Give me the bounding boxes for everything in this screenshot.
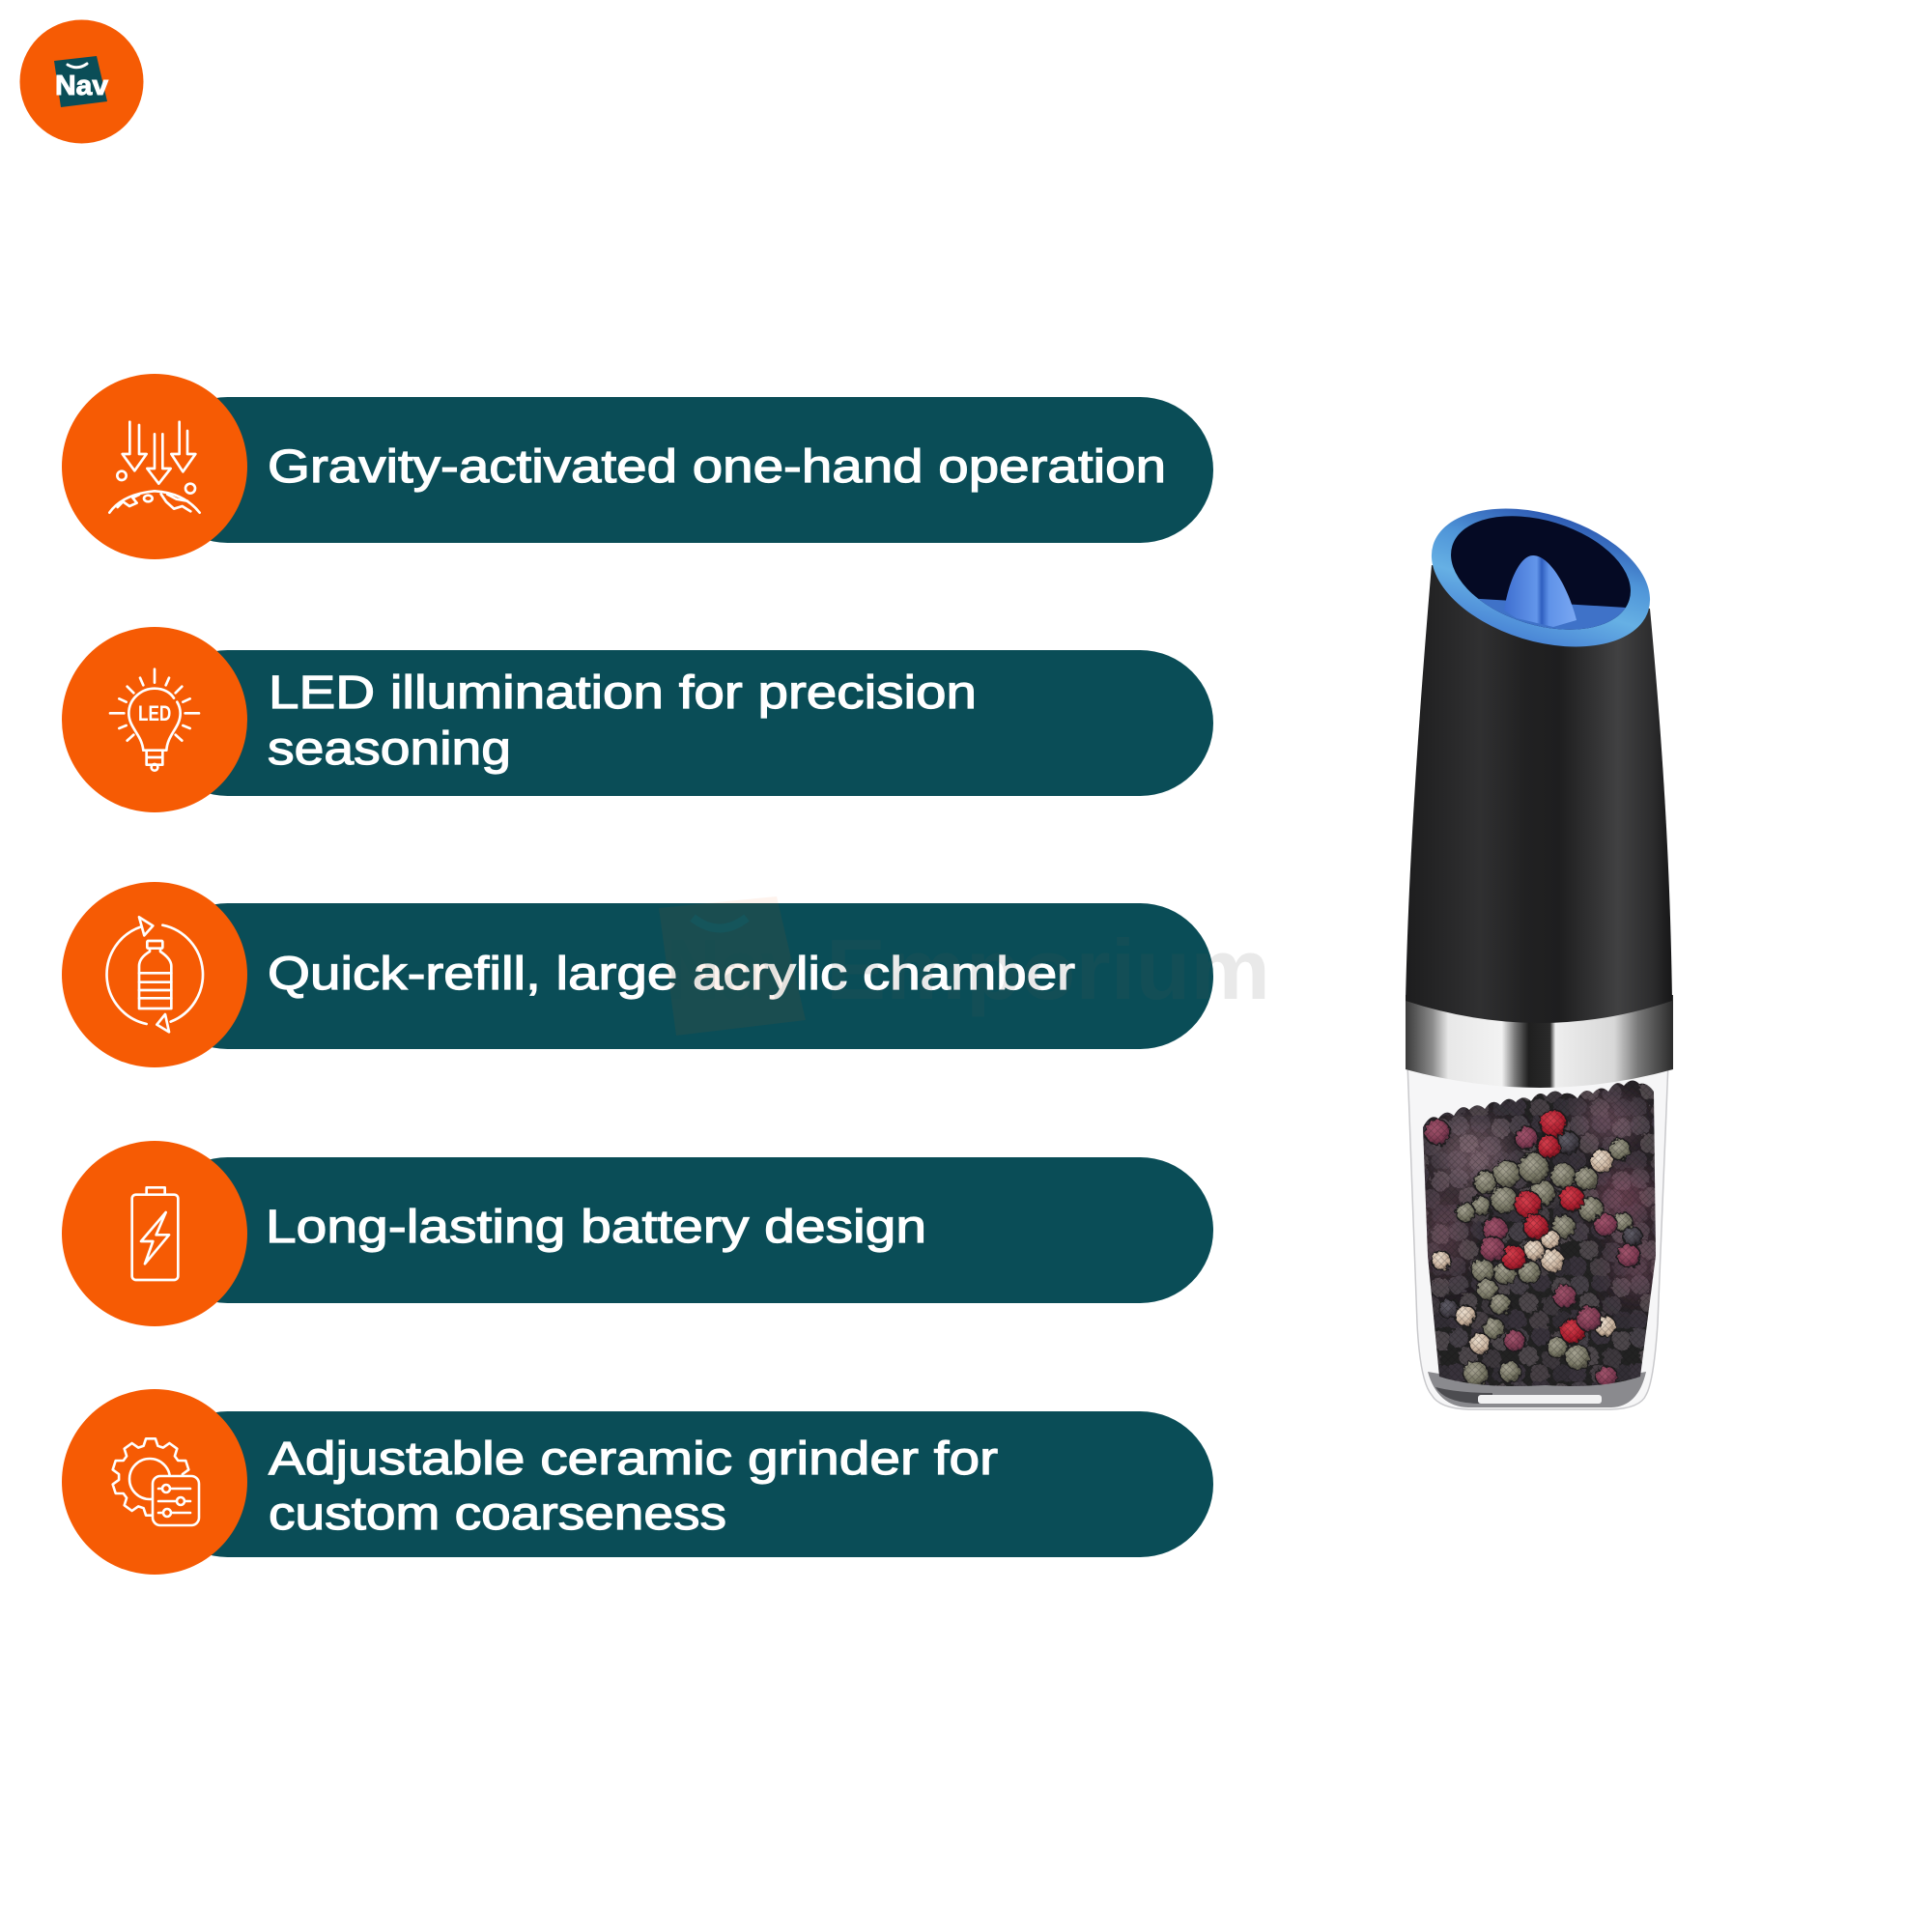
text: refill: Quick-refill, large acrylic chamber	[268, 949, 1075, 1000]
text: LED	[268, 668, 977, 775]
feature row 1: gravity	[62, 374, 1213, 559]
icon badge: LED bulb	[62, 627, 247, 812]
product photo: pepper grinder	[1406, 484, 1673, 1409]
peppercorns	[1423, 1080, 1656, 1386]
text: grinder: custom coarseness	[269, 1489, 726, 1540]
logo badge: Nav	[55, 71, 108, 101]
text: battery: Long-lasting battery design	[266, 1202, 926, 1253]
pill bar 4	[155, 1157, 1213, 1303]
feature row 2: LED	[62, 627, 1213, 812]
feature row 3: refill	[62, 882, 1213, 1067]
text: LED: seasoning	[268, 724, 511, 775]
watermark: Nav Emporium: Emporium	[826, 922, 1270, 1017]
icon badge: bottle refill	[62, 882, 247, 1067]
icon badge: battery	[62, 1141, 247, 1326]
pill bar 1	[155, 397, 1213, 543]
feature row 4: battery	[62, 1141, 1213, 1326]
feature row 5: grinder	[62, 1389, 1213, 1575]
text: gravity: Gravity-activated one-hand operation	[268, 441, 1166, 493]
pill bar 3	[155, 903, 1213, 1049]
black body	[1406, 565, 1672, 1023]
blue rim	[1432, 508, 1650, 647]
watermark: Nav Emporium	[659, 896, 1270, 1036]
text: grinder: Adjustable ceramic grinder for	[269, 1434, 998, 1485]
pill bar 2	[155, 650, 1213, 796]
icon badge: LED bulb: LED	[138, 701, 171, 725]
icon badge: gravity arrows	[62, 374, 247, 559]
text: grinder	[269, 1434, 998, 1540]
logo badge	[19, 19, 143, 143]
text: LED: LED illumination for precision	[269, 668, 977, 719]
glass jar	[1407, 1063, 1668, 1409]
pill bar 5	[155, 1411, 1213, 1557]
metal band	[1406, 995, 1673, 1088]
watermark: Nav Emporium: Nav	[667, 922, 802, 1017]
icon badge: gear settings	[62, 1389, 247, 1575]
